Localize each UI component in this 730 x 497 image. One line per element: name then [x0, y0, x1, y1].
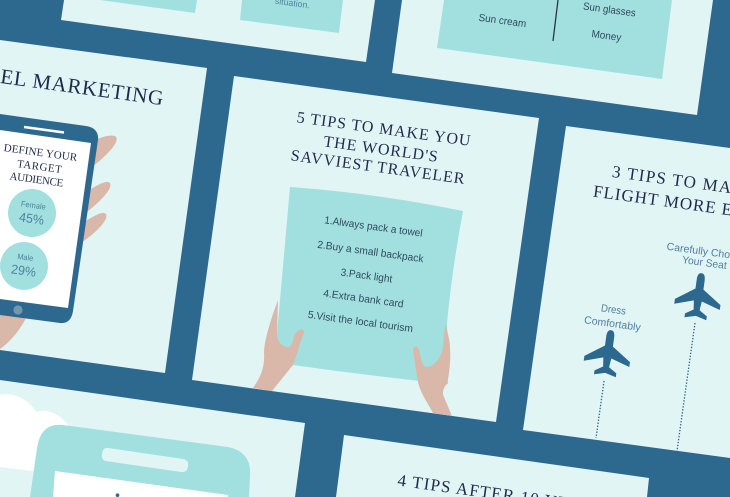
label: carefully choose your seat: Your Seat — [681, 254, 728, 272]
panel: bottom 4 tips card — [336, 435, 649, 497]
label: dress comfortably: Dress — [600, 302, 627, 318]
panel: top right packing list card: Sun cream — [478, 12, 527, 30]
label: dress comfortably — [583, 302, 642, 334]
label: carefully choose your seat — [666, 241, 730, 272]
heading: 3 tips: 3 TIPS TO MA — [611, 162, 730, 197]
heading: 5 tips — [290, 109, 472, 188]
panel: top right packing list card: Money — [591, 28, 623, 44]
heading: 5 tips: THE WORLD'S — [322, 133, 439, 166]
paper sheet with list: 5.Visit the local tourism — [307, 309, 414, 335]
panel: top right packing list card: Sun glasses — [582, 0, 636, 20]
panel: travel marketing card: 45% — [18, 209, 45, 228]
panel: travel marketing card: Female — [20, 199, 47, 212]
icon: plane 2 — [673, 270, 724, 322]
paper sheet with list — [276, 187, 463, 384]
paper sheet with list: 2.Buy a small backpack — [317, 239, 425, 265]
panel: 5 tips card — [192, 76, 539, 422]
panel: 3 flight tips card — [523, 126, 730, 458]
icon: left hand — [253, 300, 304, 391]
paper sheet with list: 1.Always pack a towel — [324, 214, 423, 240]
panel: travel marketing card: TARGET — [16, 158, 63, 176]
heading: 5 tips: SAVVIEST TRAVELER — [290, 147, 466, 188]
phone — [30, 425, 250, 497]
panel: travel marketing card — [0, 40, 207, 373]
panel: travel marketing card: Male — [17, 252, 34, 263]
icon: cloud — [0, 394, 68, 472]
panel: travel marketing card: EL MARKETING — [0, 64, 165, 110]
heading: 3 tips: FLIGHT MORE E — [592, 182, 730, 219]
heading: 5 tips: 5 TIPS TO MAKE YOU — [296, 109, 472, 150]
panel: travel marketing card: 29% — [10, 261, 37, 280]
icon: right hand — [413, 324, 452, 416]
icon: plane 1 — [582, 327, 634, 379]
heading: 3 tips — [592, 162, 730, 219]
label: carefully choose your seat: Carefully Cho — [666, 241, 730, 261]
label: dress comfortably: Comfortably — [583, 314, 642, 334]
panel: travel marketing card: DEFINE YOUR — [3, 142, 79, 164]
paper sheet with list: 4.Extra bank card — [322, 288, 404, 310]
dotted trail 2 — [677, 323, 695, 451]
panel: top right packing list card — [392, 0, 713, 115]
panel: bottom left phone card — [0, 380, 305, 497]
panel: top left card — [61, 0, 375, 62]
panel: travel marketing card: AUDIENCE — [9, 170, 64, 190]
dotted trail 1 — [596, 381, 604, 438]
paper sheet with list: 3.Pack light — [340, 267, 393, 286]
